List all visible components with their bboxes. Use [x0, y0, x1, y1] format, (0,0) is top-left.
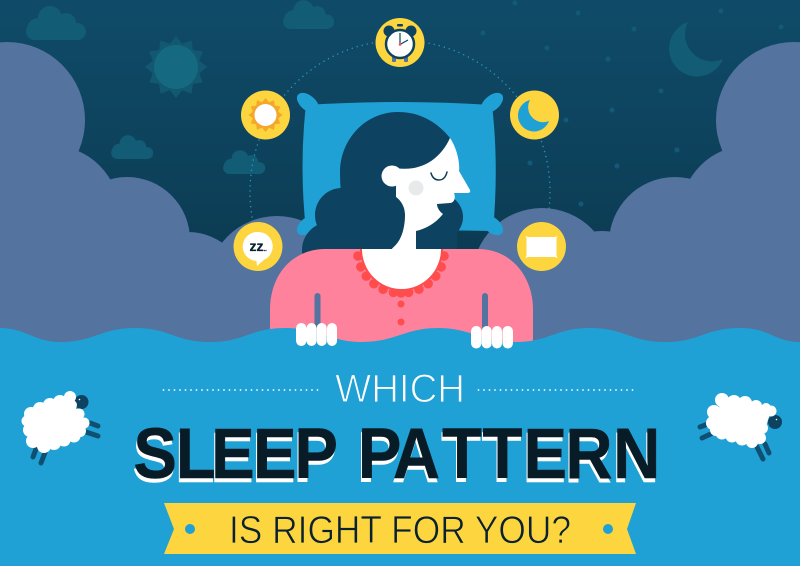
sun disc — [254, 104, 276, 126]
sheep wool — [706, 393, 776, 448]
white drop shadow: SLEEP PATTERN — [132, 419, 659, 498]
speech bubble — [243, 232, 273, 266]
faint cloud near sun icon — [223, 150, 265, 174]
sleeping woman — [302, 112, 470, 278]
yellow ribbon banner — [164, 503, 636, 554]
icon: sun — [241, 90, 290, 140]
faint cloud top centre — [283, 0, 334, 29]
night sky background — [0, 0, 800, 340]
left hand fingers — [296, 323, 337, 346]
sun rays — [248, 98, 283, 132]
pink pyjama top — [270, 249, 533, 350]
hair curls — [302, 184, 403, 278]
white pillow — [526, 236, 558, 258]
clock hands — [400, 33, 408, 44]
faint background decorations — [26, 0, 784, 206]
left dotted rule — [164, 389, 320, 391]
WHICH heading: WHICH — [335, 367, 465, 411]
title: SLEEP PATTERN — [132, 415, 660, 498]
sheep legs — [33, 423, 98, 463]
cheek — [408, 180, 424, 196]
main hair — [340, 112, 450, 251]
icon: moon — [510, 90, 559, 140]
clock bells — [384, 24, 416, 36]
blue blanket waves — [0, 328, 800, 566]
ribbon dots — [185, 524, 613, 534]
crescent — [518, 100, 549, 131]
stars — [480, 0, 784, 206]
hair behind neck — [416, 194, 463, 251]
clock feet — [392, 55, 408, 62]
subtitle: IS RIGHT FOR YOU? — [229, 509, 571, 552]
neckline — [362, 249, 441, 289]
icon: alarm clock — [376, 18, 424, 67]
right hand fingers — [471, 326, 513, 348]
dark heading: SLEEP PATTERN — [133, 415, 660, 494]
arm creases — [314, 293, 488, 335]
dotted arc of icons — [250, 40, 550, 222]
slate clouds — [0, 42, 800, 356]
ear — [382, 166, 402, 186]
faint cloud middle left — [111, 135, 153, 159]
sheep head — [74, 395, 88, 409]
clock face — [386, 30, 414, 58]
scalloped collar — [353, 249, 449, 298]
buttons — [398, 300, 404, 326]
right sheep — [700, 393, 782, 459]
right dotted rule — [478, 389, 635, 391]
sheep head — [768, 415, 782, 429]
faint sun — [145, 36, 207, 98]
face and neck — [380, 138, 470, 251]
pillow — [293, 89, 507, 239]
sheep legs — [700, 424, 769, 459]
faint cloud top left — [26, 6, 86, 40]
icon: zzz speech bubble — [234, 222, 282, 271]
clock centre — [399, 43, 401, 46]
zz label: zz.. — [250, 238, 267, 254]
sheep wool — [22, 391, 90, 453]
pillow corner ears — [293, 89, 507, 239]
closed eye — [431, 172, 447, 180]
faint crescent moon — [669, 22, 723, 76]
left sheep — [22, 391, 98, 463]
icon: pillow — [517, 222, 566, 271]
